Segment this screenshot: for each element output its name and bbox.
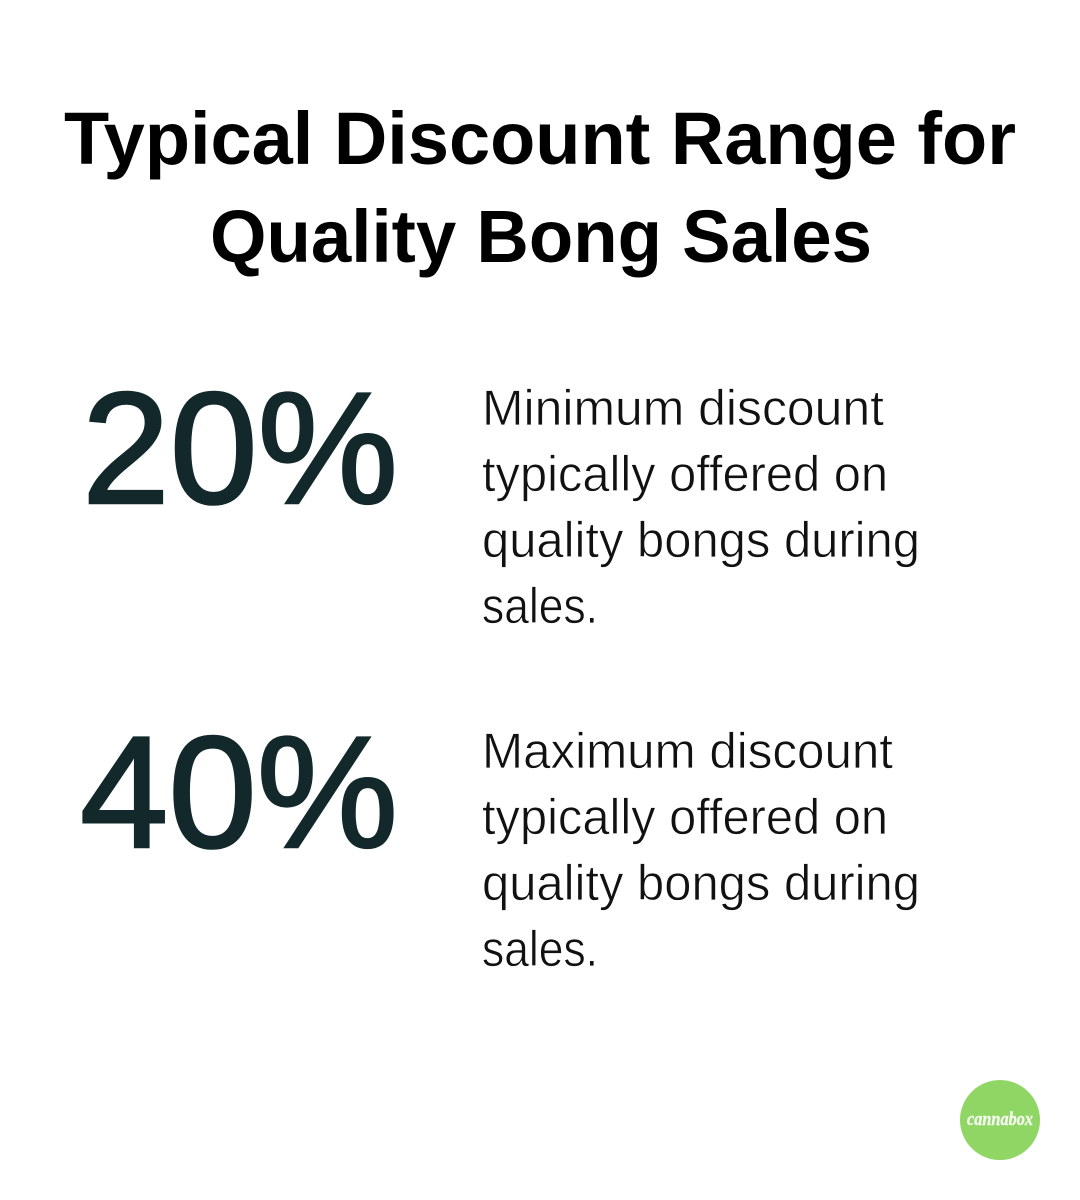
title [64, 97, 1016, 278]
description: maximum discount: quality bongs during [482, 855, 920, 911]
description: maximum discount: typically offered on [482, 789, 888, 845]
logo: cannabox badge [960, 1080, 1040, 1160]
description: minimum discount: sales. [482, 578, 598, 634]
description: minimum discount: Minimum discount [482, 380, 884, 436]
number: 40%: 40% [80, 703, 398, 881]
title: Quality Bong Sales [210, 195, 872, 278]
description: minimum discount: typically offered on [482, 446, 888, 502]
statistic: 20% minimum discount [82, 359, 920, 634]
logo: cannabox badge: cannabox [967, 1109, 1033, 1130]
description: maximum discount: sales. [482, 921, 598, 977]
description: minimum discount: quality bongs during [482, 512, 920, 568]
title: Typical Discount Range for [64, 97, 1016, 180]
description: minimum discount [482, 380, 920, 634]
description: maximum discount [482, 723, 920, 977]
statistic: 40% maximum discount [80, 703, 920, 977]
number: 20%: 20% [82, 359, 398, 537]
description: maximum discount: Maximum discount [482, 723, 893, 779]
